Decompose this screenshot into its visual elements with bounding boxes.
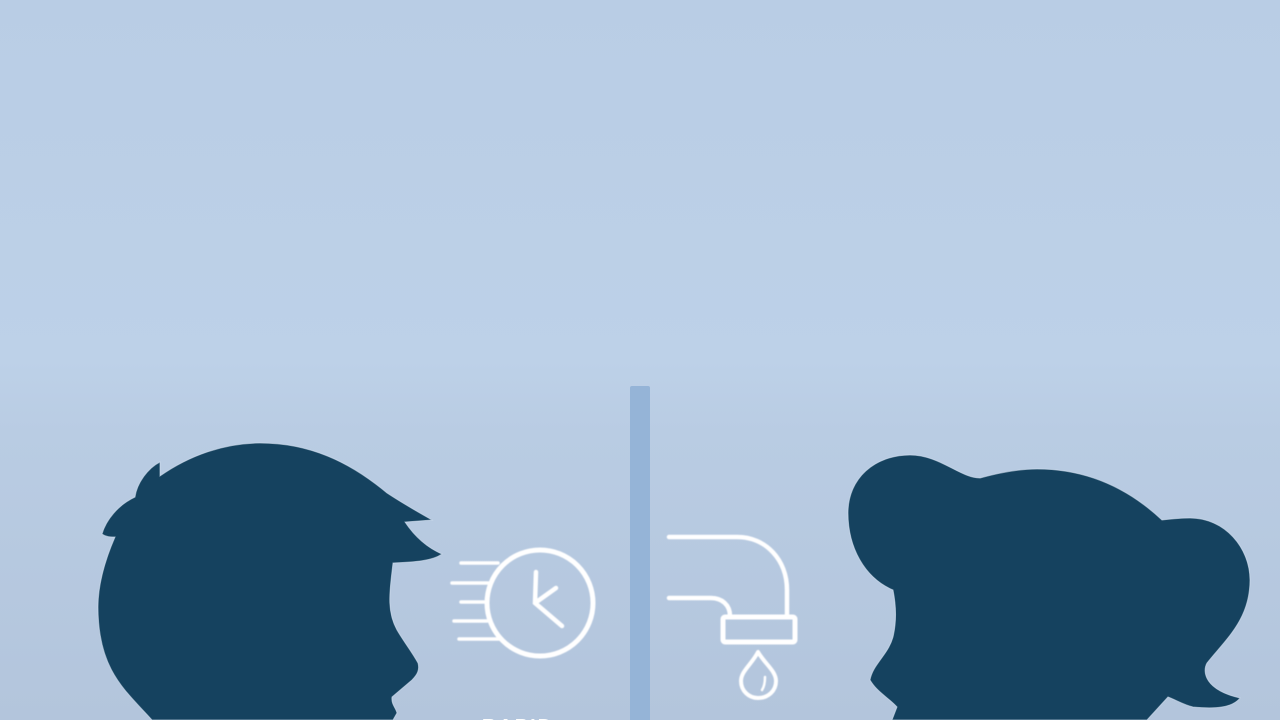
woman head silhouette bbox=[848, 455, 1250, 720]
water drop bbox=[741, 652, 776, 698]
center divider bbox=[630, 386, 650, 720]
icon: fast clock bbox=[452, 550, 593, 656]
man head silhouette bbox=[98, 443, 442, 720]
icon: dripping faucet bbox=[669, 537, 795, 698]
